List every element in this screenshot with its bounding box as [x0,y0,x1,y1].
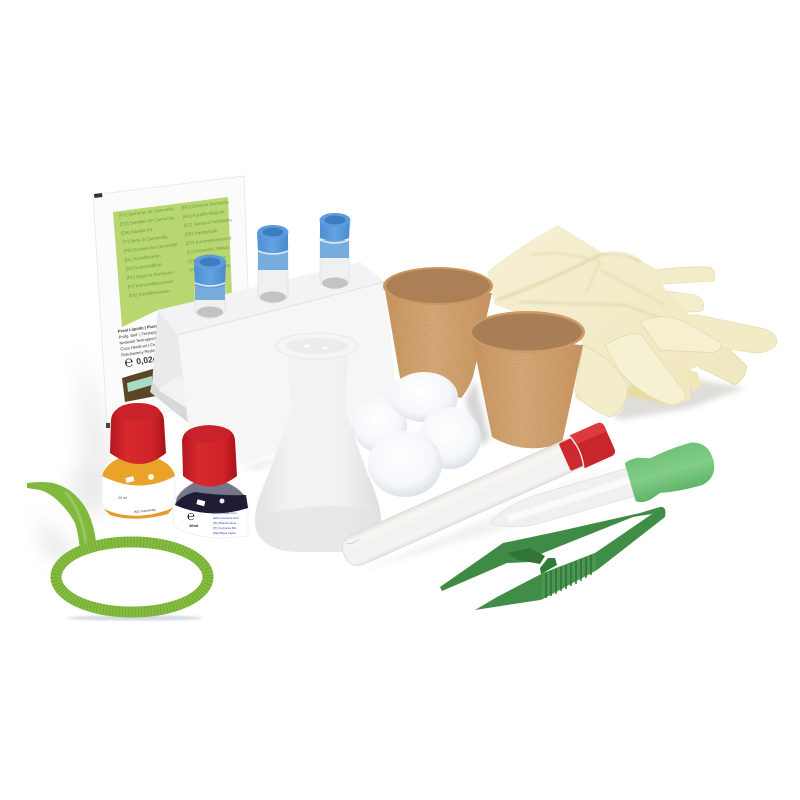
test tube 2 [257,225,288,303]
packet green label with seed names [113,197,240,327]
packet net weight: Nettowitt Testrapport [119,335,157,346]
soft drop shadows [35,350,745,620]
packet net weight: Prüfg. Beif. | Testrapport [118,329,163,340]
packet green label with seed names: [NL] Kamillezaden [124,253,162,263]
bottle body and label [102,456,175,519]
test tube 3 [320,213,350,289]
green ring with tail [27,482,208,612]
dark bottle [173,425,248,538]
packet green label with seed names: [LV] Kumelīšu Sēklas [187,245,230,255]
bottle body and label: ℮ [187,508,195,523]
packet green label with seed names: [ES] Semillas de Camomila [120,215,175,227]
bottle body and label: [PT] Corante Azul [213,511,237,515]
packet green label with seed names: [HU] Kamilla Magvak [182,209,225,219]
packet green label with seed names: [PL] Nasiona Rumianku [126,270,174,280]
packet green label with seed names: [SI] Seme Kamilice [188,254,227,264]
packet net weight: Prooi Liquido | Pluss Semen [118,321,172,334]
glove folds and shading [497,254,670,405]
red cap [182,425,237,486]
packet net weight: ℮ [123,353,134,371]
cotton balls [353,372,481,497]
bottle body and label: [DE] Blaue Farbe [213,531,236,535]
packet green label with seed names: [IT] Semi di Camomilla [122,234,168,245]
bottle body and label: [NL] Blauwe kleur [213,521,237,525]
red cap [110,403,166,464]
plastic pipette with green bulb [484,438,719,544]
bottle body and label: 20 ml [118,496,127,500]
packet barcode patch [122,368,156,402]
packet green label with seed names: [EE] Kummeliseemned [186,235,232,246]
packet green label with seed names: [DE] Kamillensamen [129,288,170,298]
erlenmeyer flask [255,333,381,552]
packet green label with seed names: [FR] Graines de Camomille [123,242,178,254]
test tube 1 [194,254,226,318]
test tube rack [150,262,398,466]
packet net weight: Coza Hendrust | Cena [120,341,161,352]
packet green label with seed names: [FI] Kamomillansiemen [128,279,174,289]
packet net weight [118,321,178,371]
bottle body and label [173,482,248,538]
bottle body and label: [ES] Colorante Azul [213,516,239,520]
glass test tube with red stopper [337,421,617,572]
orange bottle [102,403,175,519]
bottle body and label: 10ml [189,523,198,528]
packet green label with seed names: [CZ] Semena Heřmánku [183,217,233,228]
packet green label with seed names: [RO] Seminte Romanita [181,199,230,210]
packet net weight: 0,02g [136,353,159,366]
bottle body and label: INCI: Kamomilla [134,508,156,514]
gloves [487,225,777,417]
packet green label with seed names: [SK] Harmanček [185,228,218,237]
packet green label with seed names: [SV] Kamomillfrön [125,262,162,271]
packet green label with seed names: [DA] Kamille frø [121,227,153,236]
lower arm [475,507,665,610]
packet green label with seed names: [PT] Semente de Camomila [119,206,175,218]
green tweezers [440,507,665,610]
upper arm [440,507,660,591]
peat pot 2 [469,311,585,448]
packet net weight: Rakuhammy Redis [121,348,155,357]
packet green label with seed names: [HR] Sjeme Kamilice [189,263,231,273]
peat pot 1 [383,267,493,398]
ribbed grip [541,553,597,600]
bottle body and label: [IT] Colorante Blu [213,526,237,530]
seed packet [93,176,248,428]
